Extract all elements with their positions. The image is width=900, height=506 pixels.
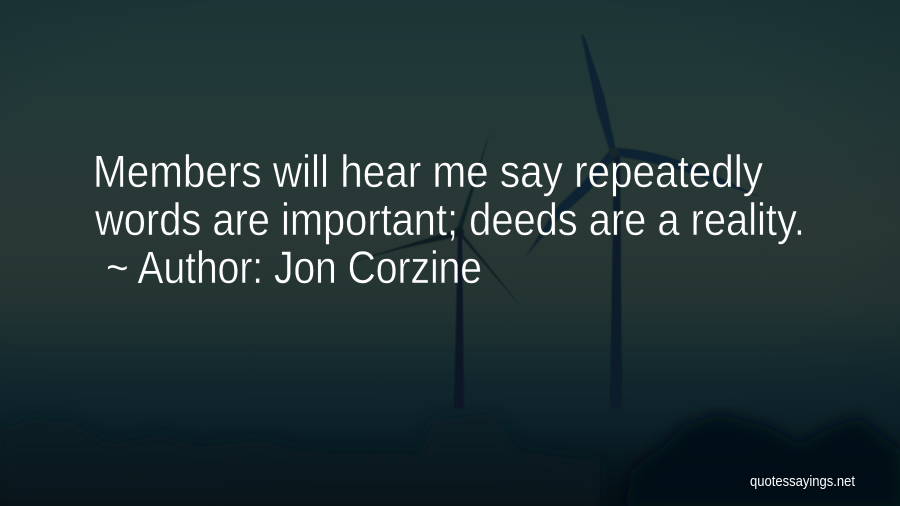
distant treeline — [0, 414, 600, 506]
dark trees at right — [625, 415, 900, 506]
quote text — [93, 146, 805, 293]
small wind turbine — [345, 132, 523, 408]
large wind turbine — [526, 34, 760, 408]
quote line 2: words are important; deeds are a reality. — [94, 194, 805, 245]
quote line 1: Members will hear me say repeatedly — [93, 146, 763, 197]
watermark: quotessayings.net — [750, 473, 856, 490]
author line: ~ Author: Jon Corzine — [106, 242, 482, 293]
